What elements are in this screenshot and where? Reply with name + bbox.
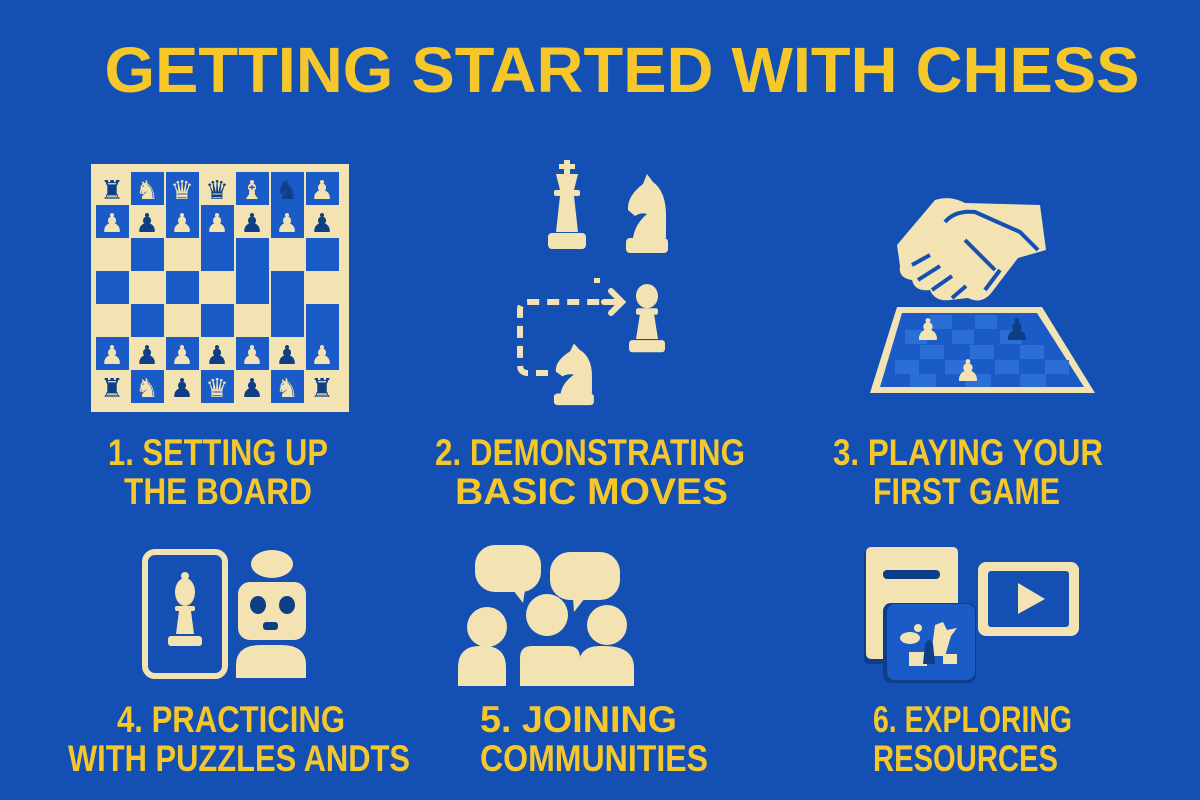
icon: chess board setup: ♛ <box>205 175 229 205</box>
icon: chess board setup: ♟ <box>170 208 194 238</box>
icon: handshake and board: ♟ <box>1004 314 1030 347</box>
label 2: 2. DEMONSTRATING <box>435 432 745 473</box>
icon: chess board setup: ♟ <box>310 340 334 370</box>
label 1 line 2: THE BOARD <box>124 471 312 512</box>
icon: chess board setup <box>91 164 349 412</box>
label 4 line 2: WITH PUZZLES ANDTS <box>68 738 410 779</box>
label 1: 1. SETTING UP <box>108 432 328 473</box>
icon: chess board setup: ♞ <box>135 175 159 205</box>
icon: handshake and board: ♟ <box>955 355 981 388</box>
icon: chess board setup: ♟ <box>205 208 229 238</box>
label 5: 5. JOINING <box>480 699 677 740</box>
icon: chess board setup: ♟ <box>170 340 194 370</box>
label 6: 6. EXPLORING <box>873 699 1072 740</box>
icon: chess board setup: ♜ <box>100 373 124 403</box>
bishop <box>168 572 202 646</box>
icon: chess board setup: ♜ <box>310 373 334 403</box>
dashed arrow <box>520 278 608 373</box>
icon: chess board setup: ♟ <box>310 208 334 238</box>
icon: chess board setup: ♟ <box>100 208 124 238</box>
icon: chess board setup: ♞ <box>135 373 159 403</box>
icon: chess board setup: ♛ <box>205 373 229 403</box>
icon: chess board setup: ♟ <box>100 340 124 370</box>
label 4: 4. PRACTICING <box>117 699 345 740</box>
label 3 line 2: FIRST GAME <box>873 471 1060 512</box>
icon: chess board setup: ♞ <box>275 373 299 403</box>
icon: chess board setup: ♟ <box>170 373 194 403</box>
label 2 line 2: BASIC MOVES <box>455 471 728 512</box>
icon: chess board setup: ♟ <box>135 208 159 238</box>
icon: community <box>458 545 634 686</box>
knight moving <box>554 344 594 405</box>
icon: chess board setup: ♟ <box>240 208 264 238</box>
label 3: 3. PLAYING YOUR <box>833 432 1103 473</box>
icon: basic moves <box>520 160 668 405</box>
icon: resources <box>864 547 1079 683</box>
icon: chess board setup: ♞ <box>275 175 299 205</box>
icon: chess board setup: ♛ <box>170 175 194 205</box>
icon: handshake and board: ♟ <box>915 314 941 347</box>
icon: chess board setup: ♟ <box>240 340 264 370</box>
icon: chess board setup: ♝ <box>240 175 264 205</box>
knight piece <box>626 174 668 253</box>
icon: chess board setup: ♟ <box>310 175 334 205</box>
icon: chess board setup: ♟ <box>275 208 299 238</box>
icon: puzzle card and robot <box>145 550 306 678</box>
icon: chess board setup: ♟ <box>135 340 159 370</box>
icon: handshake and board <box>870 198 1095 393</box>
pawn piece <box>629 284 665 352</box>
label 6 line 2: RESOURCES <box>873 738 1058 779</box>
label 5 line 2: COMMUNITIES <box>480 738 708 779</box>
icon: chess board setup: ♟ <box>240 373 264 403</box>
icon: chess board setup: ♜ <box>100 175 124 205</box>
icon: chess board setup: ♟ <box>205 340 229 370</box>
icon: chess board setup: ♟ <box>275 340 299 370</box>
king piece <box>548 160 586 249</box>
title: GETTING STARTED WITH CHESS <box>104 34 1140 106</box>
